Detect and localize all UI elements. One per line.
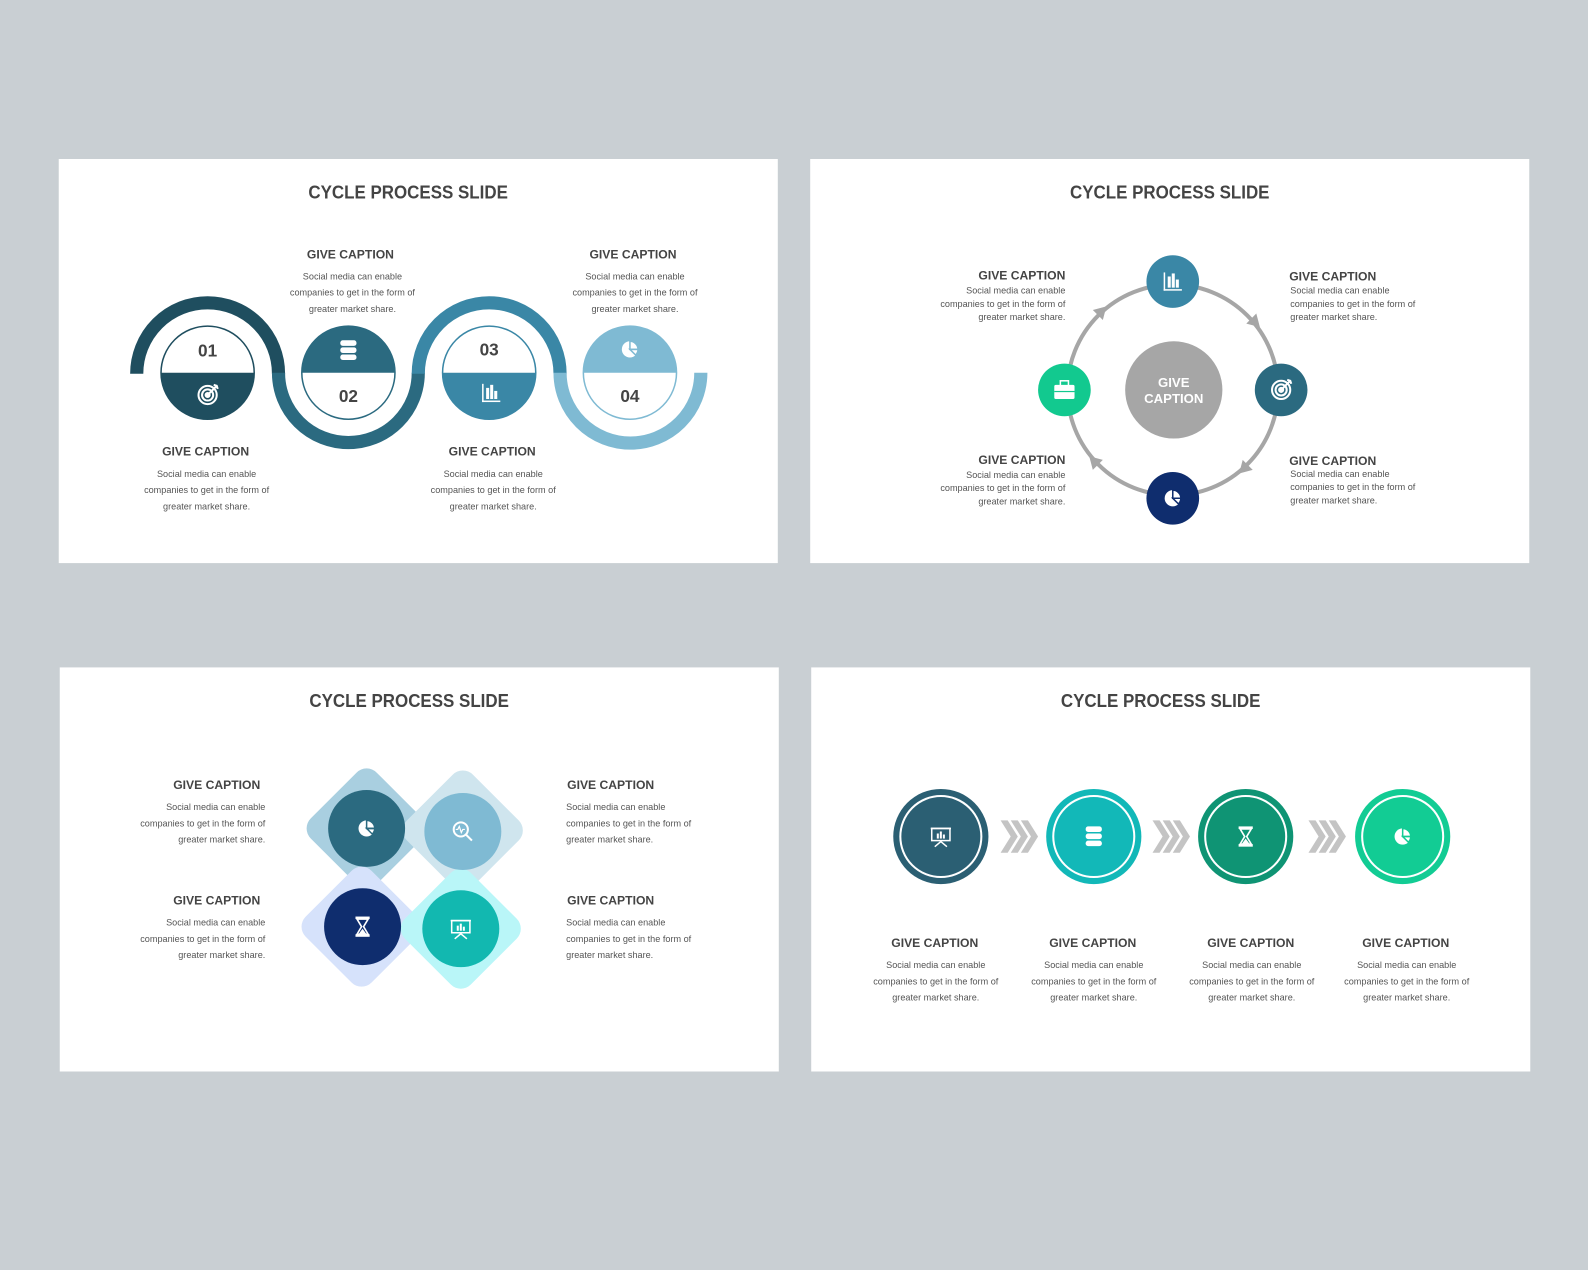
captions: companies to get in the form of — [140, 934, 266, 944]
captions: companies to get in the form of — [1290, 299, 1416, 309]
panel: wave process — [59, 159, 778, 563]
title: CYCLE PROCESS SLIDE — [308, 183, 508, 203]
captions: GIVE CAPTION — [1049, 936, 1136, 950]
captions: GIVE CAPTION — [978, 453, 1065, 467]
captions: Social media can enable — [566, 918, 665, 928]
step 03: 03 — [480, 339, 499, 359]
captions: Social media can enable — [166, 802, 265, 812]
captions: GIVE CAPTION — [162, 445, 249, 459]
captions: companies to get in the form of — [290, 288, 415, 298]
step circles — [893, 789, 1450, 884]
captions: greater market share. — [450, 501, 537, 511]
node: bottom — [1146, 472, 1199, 525]
captions: greater market share. — [566, 835, 653, 845]
captions: Social media can enable — [1044, 960, 1143, 970]
captions: Social media can enable — [966, 470, 1065, 480]
captions: GIVE CAPTION — [567, 893, 654, 907]
captions: Social media can enable — [966, 286, 1065, 296]
captions: GIVE CAPTION — [589, 247, 676, 261]
captions: Social media can enable — [886, 960, 985, 970]
captions: GIVE CAPTION — [891, 936, 978, 950]
captions: companies to get in the form of — [572, 288, 698, 298]
captions: greater market share. — [1290, 495, 1377, 505]
captions: greater market share. — [309, 304, 396, 314]
node: left — [1038, 364, 1091, 416]
captions: Social media can enable — [444, 469, 543, 479]
captions: companies to get in the form of — [940, 299, 1066, 309]
center circle — [1125, 341, 1222, 439]
step 04: 04 — [620, 386, 640, 406]
step 04 — [583, 326, 677, 419]
captions: Social media can enable — [157, 469, 256, 479]
captions: companies to get in the form of — [1031, 976, 1157, 986]
ring with arrows — [1067, 285, 1278, 495]
step 03 — [443, 326, 536, 419]
captions: Social media can enable — [303, 272, 402, 282]
captions: Social media can enable — [566, 802, 665, 812]
captions: Social media can enable — [1290, 286, 1390, 296]
captions: greater market share. — [978, 312, 1065, 322]
captions: GIVE CAPTION — [307, 247, 394, 261]
captions — [140, 778, 692, 960]
captions: greater market share. — [978, 496, 1065, 506]
captions: greater market share. — [1050, 993, 1137, 1003]
step 02 — [302, 326, 395, 419]
panel: circular cycle — [810, 159, 1529, 563]
panel: linear steps — [811, 667, 1530, 1071]
diamond grid — [296, 763, 529, 995]
step 01: 01 — [198, 340, 218, 360]
captions: greater market share. — [178, 835, 265, 845]
captions: companies to get in the form of — [873, 976, 999, 986]
center circle: CAPTION — [1144, 391, 1203, 406]
captions: greater market share. — [892, 993, 979, 1003]
captions: Social media can enable — [1202, 960, 1301, 970]
captions: GIVE CAPTION — [1289, 454, 1376, 468]
captions — [144, 247, 698, 511]
captions: GIVE CAPTION — [173, 778, 260, 792]
panel: diamonds — [60, 667, 779, 1071]
captions: GIVE CAPTION — [1362, 936, 1449, 950]
captions: GIVE CAPTION — [173, 893, 260, 907]
center circle: GIVE — [1158, 375, 1190, 390]
captions: greater market share. — [591, 304, 679, 314]
title: CYCLE PROCESS SLIDE — [1070, 183, 1269, 203]
captions: companies to get in the form of — [566, 818, 692, 828]
captions: companies to get in the form of — [431, 485, 556, 495]
captions: companies to get in the form of — [1290, 482, 1416, 492]
captions: companies to get in the form of — [144, 485, 270, 495]
captions: greater market share. — [163, 501, 250, 511]
title: CYCLE PROCESS SLIDE — [1061, 691, 1260, 711]
wave path — [137, 303, 701, 443]
captions: Social media can enable — [585, 272, 685, 282]
captions: Social media can enable — [1290, 469, 1390, 479]
captions: GIVE CAPTION — [1289, 270, 1376, 284]
captions: companies to get in the form of — [1344, 976, 1470, 986]
title: CYCLE PROCESS SLIDE — [309, 691, 509, 711]
captions: companies to get in the form of — [1189, 976, 1315, 986]
captions: GIVE CAPTION — [449, 445, 536, 459]
node: right — [1255, 364, 1307, 416]
captions: greater market share. — [1363, 993, 1450, 1003]
captions: greater market share. — [1208, 993, 1295, 1003]
captions: companies to get in the form of — [140, 818, 266, 828]
captions: GIVE CAPTION — [567, 778, 654, 792]
captions: greater market share. — [566, 950, 653, 960]
node: top — [1146, 255, 1199, 308]
captions: companies to get in the form of — [566, 934, 692, 944]
captions: companies to get in the form of — [940, 483, 1066, 493]
step 01 — [161, 326, 254, 419]
captions — [873, 936, 1470, 1003]
captions — [940, 269, 1416, 506]
step 02: 02 — [339, 386, 358, 406]
chevron arrows — [1001, 820, 1346, 853]
captions: Social media can enable — [166, 918, 265, 928]
captions: greater market share. — [178, 950, 265, 960]
captions: GIVE CAPTION — [1207, 936, 1294, 950]
captions: greater market share. — [1290, 312, 1377, 322]
captions: Social media can enable — [1357, 960, 1456, 970]
captions: GIVE CAPTION — [978, 269, 1065, 283]
